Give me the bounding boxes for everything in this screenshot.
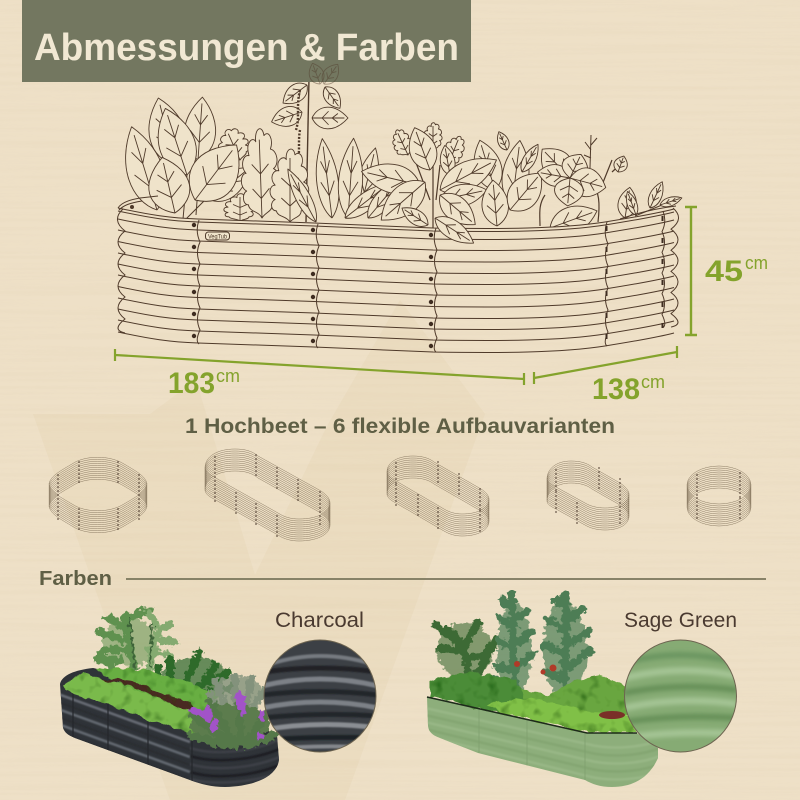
back rim bbox=[118, 196, 158, 210]
dimension: height 45 cm bbox=[685, 207, 768, 335]
label: Charcoal: Charcoal bbox=[275, 609, 364, 632]
lettuce and low greens bbox=[430, 672, 636, 732]
dimension: depth 138 cm: 138 bbox=[592, 373, 640, 406]
tomato plants bbox=[436, 595, 590, 698]
variant 2: long stadium bbox=[205, 449, 330, 541]
sketched plants bbox=[125, 82, 682, 228]
variant 1: lens shape bbox=[49, 457, 147, 533]
dimension: width 183 cm: 183 bbox=[168, 367, 215, 400]
dimension: height 45 cm: 45 bbox=[705, 255, 743, 288]
corrugated ribs bbox=[118, 208, 674, 352]
scalloped edges and seams bbox=[117, 209, 125, 333]
drooping leaf bbox=[430, 210, 479, 251]
bed wall bbox=[60, 668, 279, 787]
line drawing: raised bed bbox=[117, 196, 679, 352]
label: Sage Green: Sage Green bbox=[624, 609, 737, 632]
dimension: width 183 cm: cm bbox=[216, 366, 240, 386]
tomatoes and red lettuce bbox=[514, 661, 625, 719]
photo: sage green bed bbox=[420, 595, 665, 795]
subtitle: 1 Hochbeet – 6 flexible Aufbauvarianten bbox=[185, 415, 615, 438]
dimension: height 45 cm: cm bbox=[745, 253, 768, 273]
tall plant bbox=[98, 610, 176, 668]
photo: charcoal bed bbox=[60, 606, 280, 787]
brand tag: VegTub bbox=[208, 234, 228, 240]
title text: Abmessungen & Farben bbox=[34, 27, 459, 69]
variant 5: round bbox=[687, 466, 751, 526]
brand tag bbox=[206, 232, 230, 240]
swatch: sage green bbox=[624, 640, 737, 753]
bed wall bbox=[427, 698, 658, 787]
section heading: Farben: Farben bbox=[39, 568, 112, 590]
purple flowers bbox=[188, 690, 264, 739]
mid shrub bbox=[158, 652, 232, 697]
variant 4: short stadium bbox=[547, 461, 629, 530]
swatch: charcoal bbox=[262, 640, 378, 752]
leaves showing through banner bbox=[306, 60, 344, 88]
seam bolts bbox=[192, 216, 664, 348]
watermark logo bbox=[33, 300, 485, 800]
variant 3: stadium bbox=[387, 456, 489, 536]
dimension: depth 138 cm bbox=[534, 346, 677, 406]
dimension: width 183 cm bbox=[115, 349, 524, 400]
title banner bbox=[22, 0, 471, 88]
dimension: depth 138 cm: cm bbox=[641, 372, 665, 392]
herbs and lavender bush bbox=[190, 675, 275, 745]
lettuce rows bbox=[62, 668, 220, 737]
dark rim bbox=[427, 697, 637, 733]
